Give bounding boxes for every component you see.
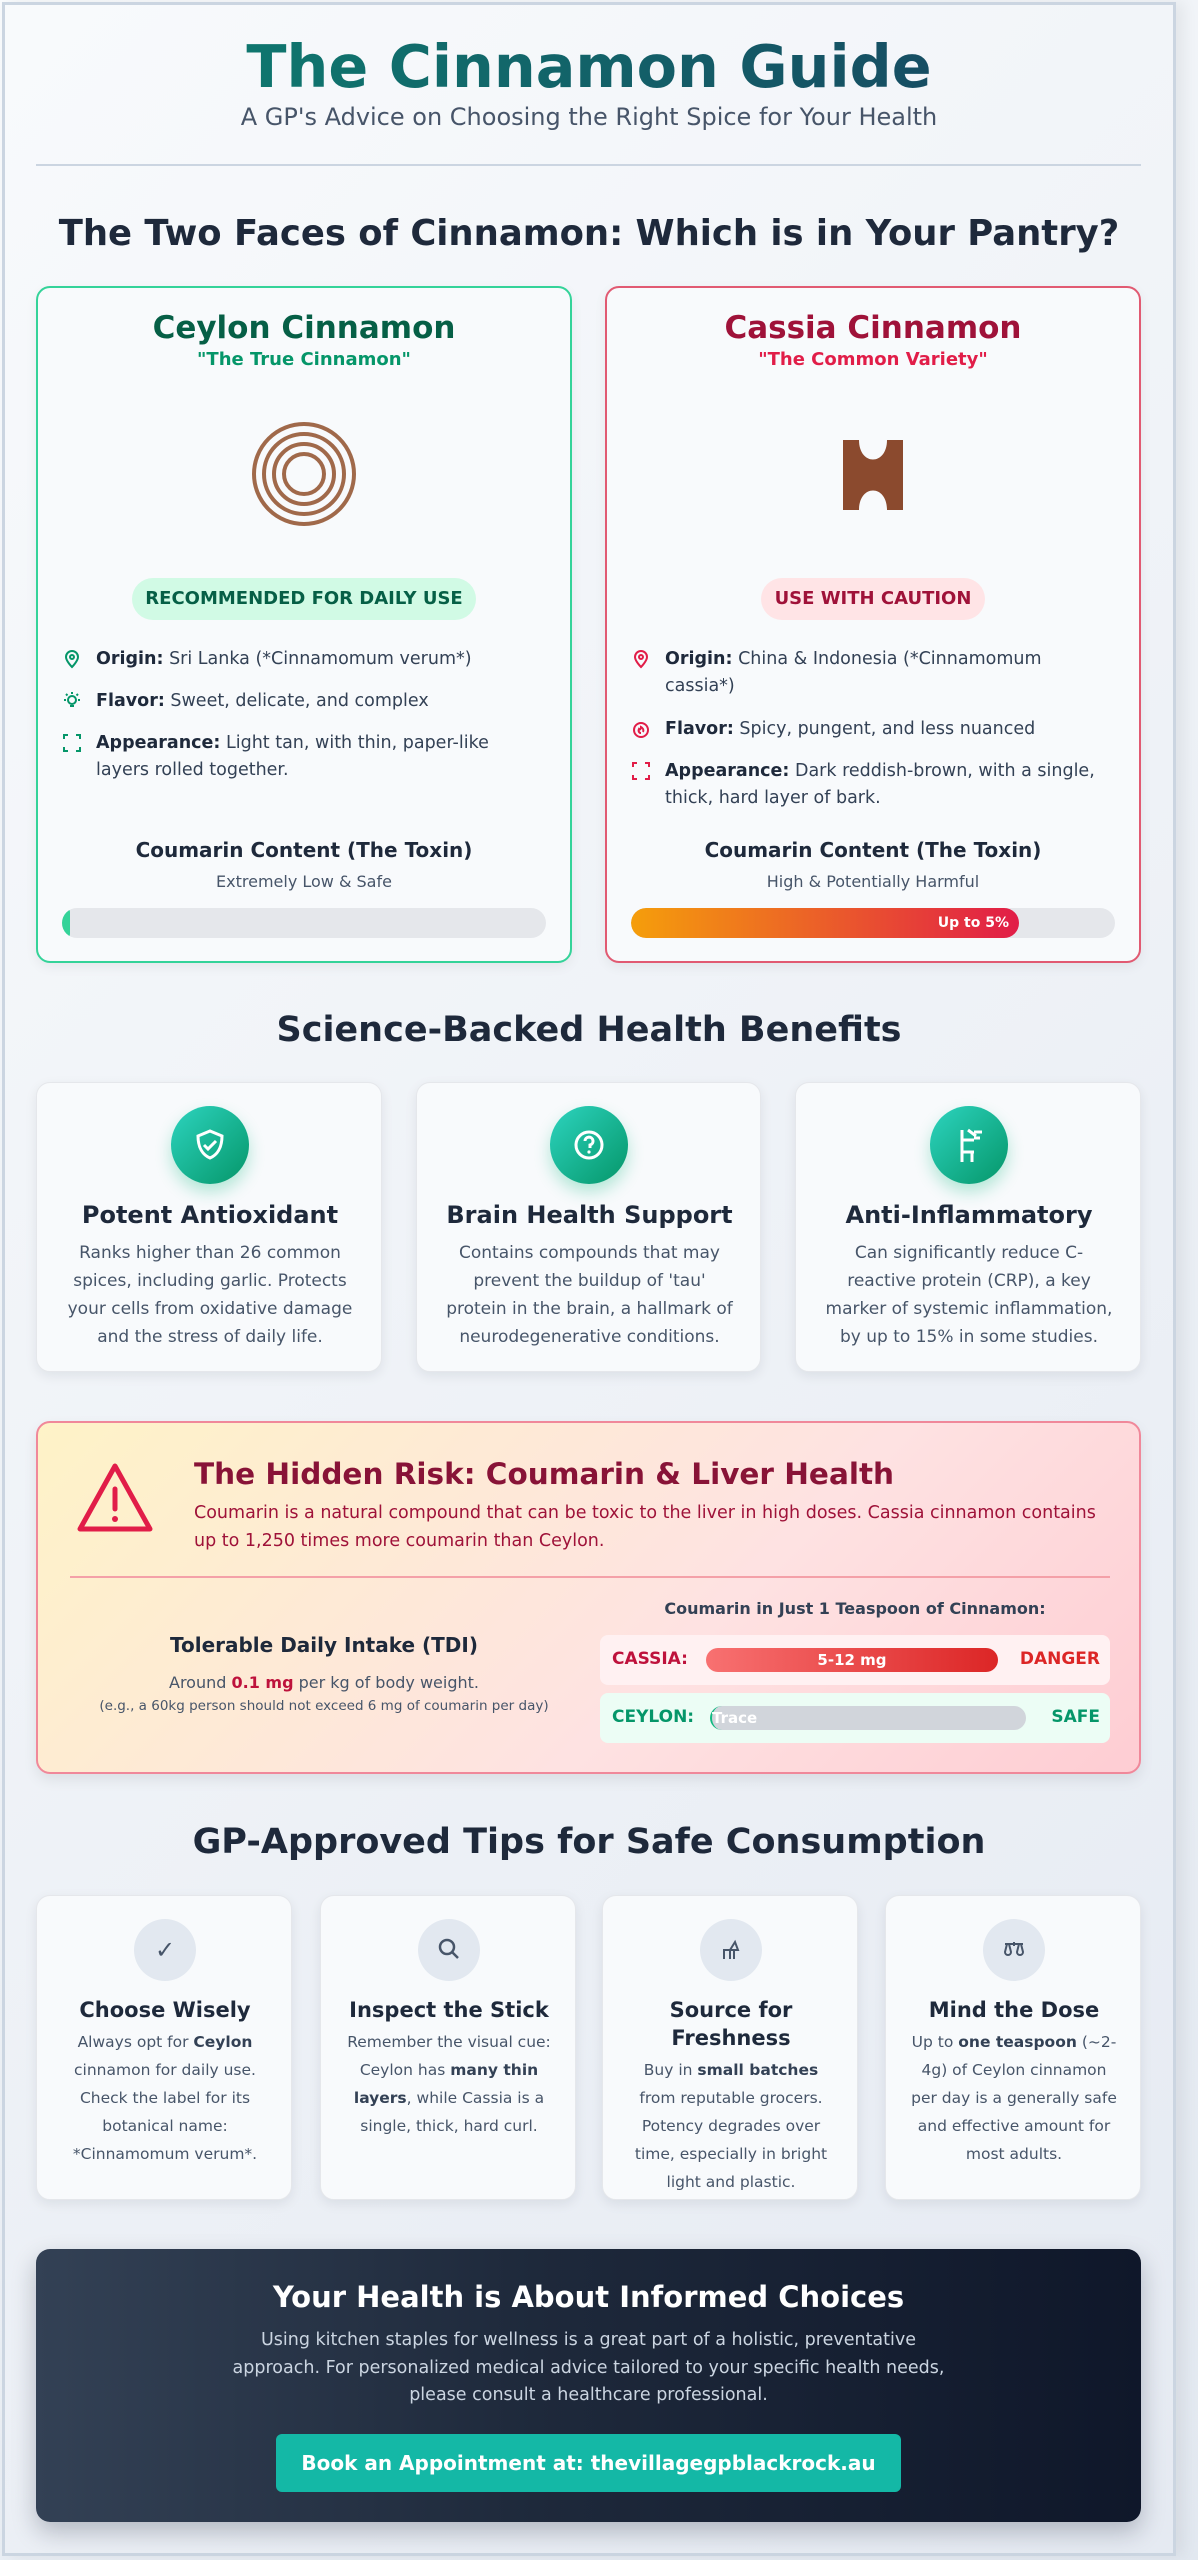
section heading: two faces: The Two Faces of Cinnamon: Which is in Your Pantry? [59,213,1119,254]
panel: footer call to action [36,2249,1141,2522]
ceylon title: Ceylon Cinnamon [153,310,455,346]
badge: recommended [132,578,476,620]
icon: check: ✓ [155,1936,175,1964]
panel: tip freshness [602,1895,858,2200]
cassia subtitle: "The Common Variety" [758,349,988,370]
tip text: Remember the visual cue: Ceylon has many thin layers, while Cassia is a single, thick, hard curl. [347,2033,551,2135]
badge: caution: USE WITH CAUTION [775,588,971,609]
benefit text: Can significantly reduce C-reactive protein (CRP), a key marker of systemic inflammation, by up to 15% in some studies. [826,1243,1112,1347]
coumarin bar: cassia [631,908,1115,938]
section heading: tips: GP-Approved Tips for Safe Consumption [193,1822,985,1862]
tip title: Inspect the Stick [349,1998,549,2022]
item: origin: Origin: Sri Lanka (*Cinnamomum verum*) [96,649,472,669]
icon: check [134,1919,196,1981]
row: cassia [600,1635,1110,1685]
benefit title: Anti-Inflammatory [846,1201,1092,1229]
TDI block [99,1633,549,1714]
row: ceylon [600,1693,1110,1743]
button: book appointment [276,2434,901,2492]
item: flavor: Flavor: Sweet, delicate, and complex [96,691,429,711]
panel: hidden risk [36,1421,1141,1774]
item: appearance: Appearance: Light tan, with thin, paper-like layers rolled together. [96,733,489,780]
coumarin subtext: High & Potentially Harmful [767,872,979,891]
ceylon subtitle: "The True Cinnamon" [197,349,411,370]
comparison chart [600,1599,1110,1743]
section heading: benefits: Science-Backed Health Benefits [276,1010,902,1050]
cassia title: Cassia Cinnamon [724,310,1022,346]
button: book appointment: Book an Appointment at: thevillagegpblackrock.au [301,2451,876,2475]
panel: tip inspect [320,1895,576,2200]
tip text: Buy in small batches from reputable grocers. Potency degrades over time, especially in bright light and plastic. [635,2061,827,2191]
coumarin bar: ceylon [62,908,546,938]
panel: tip choose wisely [36,1895,292,2200]
item: origin: Origin: China & Indonesia (*Cinnamomum cassia*) [665,649,1042,696]
benefit text: Contains compounds that may prevent the buildup of 'tau' protein in the brain, a hallmark of neurodegenerative conditions. [446,1243,733,1347]
icon: warning [78,1464,152,1532]
panel: cassia [605,286,1141,963]
tip text: Always opt for Ceylon cinnamon for daily use. Check the label for its botanical name: *Cinnamomum verum*. [73,2033,257,2163]
risk heading: The Hidden Risk: Coumarin & Liver Health [194,1457,894,1491]
coumarin heading: Coumarin Content (The Toxin) [705,838,1041,862]
row: cassia: 5-12 mg [817,1651,887,1669]
footer heading: Your Health is About Informed Choices [273,2280,904,2314]
benefit title: Brain Health Support [446,1201,733,1229]
item: appearance: Appearance: Dark reddish-brown, with a single, thick, hard layer of bark. [665,761,1095,808]
panel: tip dose [885,1895,1141,2200]
subtitle: A GP's Advice on Choosing the Right Spice for Your Health [241,103,937,131]
icon: magnifier [418,1919,480,1981]
TDI block: Around 0.1 mg per kg of body weight. [169,1673,479,1692]
coumarin subtext: Extremely Low & Safe [216,872,392,891]
icon: rolled quills [252,422,356,526]
item: flavor: Flavor: Spicy, pungent, and less nuanced [665,719,1035,739]
TDI block: Tolerable Daily Intake (TDI) [170,1633,478,1657]
coumarin heading: Coumarin Content (The Toxin) [136,838,472,862]
row: ceylon: CEYLON: [612,1707,694,1727]
footer text: Using kitchen staples for wellness is a great part of a holistic, preventative approach. For personalized medical advice tailored to your specific health needs, please consult a healthcare professional. [233,2330,944,2405]
comparison chart: Coumarin in Just 1 Teaspoon of Cinnamon: [664,1599,1046,1618]
risk text: Coumarin is a natural compound that can be toxic to the liver in high doses. Cassia cinnamon contains up to 1,250 times more coumarin than Ceylon. [194,1503,1096,1551]
benefit title: Potent Antioxidant [82,1201,338,1229]
panel: ceylon [36,286,572,963]
panel: anti-inflammatory [795,1082,1141,1372]
panel: brain [416,1082,761,1372]
tip title: Choose Wisely [79,1998,251,2022]
row: ceylon: SAFE [1051,1707,1100,1727]
benefit text: Ranks higher than 26 common spices, including garlic. Protects your cells from oxidative damage and the stress of daily life. [68,1243,352,1347]
TDI block: (e.g., a 60kg person should not exceed 6 mg of coumarin per day) [99,1698,549,1714]
coumarin bar: cassia: Up to 5% [938,915,1009,931]
row: cassia: CASSIA: [612,1649,688,1669]
panel: antioxidant [36,1082,382,1372]
badge: caution [761,578,985,620]
tip title: Mind the Dose [929,1998,1099,2022]
icon: store [700,1919,762,1981]
row: cassia: DANGER [1020,1649,1100,1669]
icon: shield [171,1106,249,1184]
icon: scales [983,1919,1045,1981]
tip title: Source for Freshness [670,1998,792,2050]
icon: brain [550,1106,628,1184]
tip text: Up to one teaspoon (~2-4g) of Ceylon cinnamon per day is a generally safe and effective amount for most adults. [911,2033,1117,2163]
row: ceylon: Trace [712,1709,757,1727]
icon: thick curl [843,440,903,510]
icon: body [930,1106,1008,1184]
badge: recommended: RECOMMENDED FOR DAILY USE [145,588,463,609]
title: The Cinnamon Guide [246,32,932,101]
